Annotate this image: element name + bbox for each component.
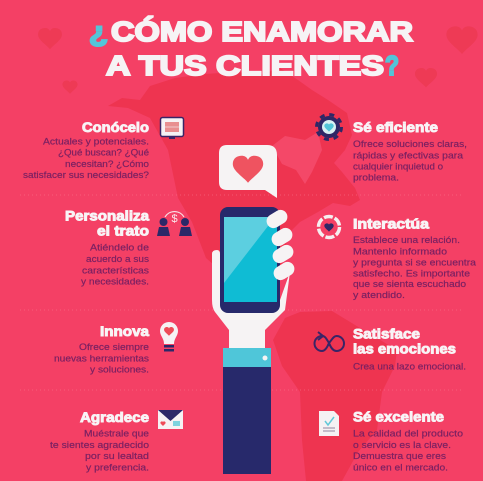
palm and thumb [212,250,290,348]
panel: Conócelo: necesitan? ¿Cómo [65,159,149,169]
icon: document check [319,411,339,436]
panel: Sé eficiente [353,120,467,182]
panel: Interactúa: y pregunta si se encuentra [353,258,476,268]
icon: people with dollar [157,212,192,236]
sleeve [223,367,271,474]
title [89,16,413,81]
panel: Innova [54,324,150,374]
panel: Sé eficiente: problema. [353,172,399,182]
panel: Interactúa: Interactúa [353,216,430,232]
panel: Innova: nuevas herramientas [54,354,150,364]
panel: Satisface las emociones: Crea una lazo emocional. [353,362,466,372]
fingers [264,207,297,283]
panel: Conócelo [23,120,149,180]
panel: Personaliza el trato: características [82,266,150,276]
title: ¿ [89,16,108,47]
title: ? [385,50,399,81]
title: CÓMO ENAMORAR [111,16,413,47]
panel: Innova: Ofrece siempre [79,342,149,352]
panel: Agradece: te sientes agradecido [50,440,149,450]
panel: Personaliza el trato: Atiéndelo de [90,242,149,252]
icon: circular arrows [318,216,340,238]
icon: infinity loop [314,332,344,351]
world map [108,68,397,481]
panel: Sé eficiente: rápidas y efectivas para [353,150,463,160]
panel: Innova: Innova [100,324,150,339]
panel: Sé excelente [353,410,463,472]
cuff [223,348,271,367]
panel: Agradece: Muéstrale que [84,428,149,438]
panel: Personaliza el trato: el trato [97,224,149,238]
panel: Sé excelente: único en el mercado. [353,462,448,472]
panel: Sé eficiente: cualquier inquietud o [353,162,443,172]
panel: Sé excelente: o servicio es la clave. [353,440,451,450]
title: A TUS CLIENTES [106,50,384,81]
panel: Satisface las emociones: las emociones [353,342,456,356]
panel: Satisface las emociones: Satisface [353,326,421,342]
heart in letter O [325,28,333,35]
icon: monitor [160,118,184,139]
panel: Conócelo: satisfacer sus necesidades? [23,170,149,180]
panel: Personaliza el trato: acuerdo a sus [86,254,150,264]
panel: Interactúa: y atendido. [353,290,405,300]
phone [220,207,280,313]
panel: Personaliza el trato: Personaliza [65,208,150,224]
panel: Agradece: Agradece [80,410,150,425]
panel: Conócelo: ¿Qué buscan? ¿Qué [58,148,149,158]
panel: Interactúa [353,216,476,300]
panel: Sé excelente: Sé excelente [353,410,445,424]
icon: envelope [158,410,183,429]
panel: Interactúa: que se sienta escuchado [353,279,466,289]
panel: Interactúa: Establece una relación. [353,235,460,245]
panel: Agradece: y preferencia. [86,462,149,472]
panel: Personaliza el trato [65,208,150,286]
icon: people with dollar: $ [171,213,178,225]
decorative hearts [38,26,478,94]
panel: Innova: y soluciones. [90,364,149,374]
panel: Interactúa: Mantenlo informado [353,246,447,256]
panel: Personaliza el trato: y necesidades. [81,276,149,286]
icon: gear [316,114,342,140]
panel: Sé eficiente: Ofrece soluciones claras, [353,139,467,149]
panel: Agradece [50,410,150,472]
hand holding phone [212,207,297,474]
panel: Conócelo: Actuales y potenciales. [43,136,149,146]
panel: Sé excelente: La calidad del producto [353,428,463,438]
panel: Agradece: por su lealtad [85,451,149,461]
panel: Interactúa: satisfecho. Es importante [353,268,470,278]
icon: light bulb [160,322,178,352]
Hudson Bay [272,132,322,184]
panel: Conócelo: Conócelo [82,120,149,135]
panel: Satisface las emociones [353,326,466,372]
panel: Sé eficiente: Sé eficiente [353,120,439,135]
panel: Sé excelente: Demuestra que eres [353,451,447,461]
speech bubble with heart [219,145,277,198]
